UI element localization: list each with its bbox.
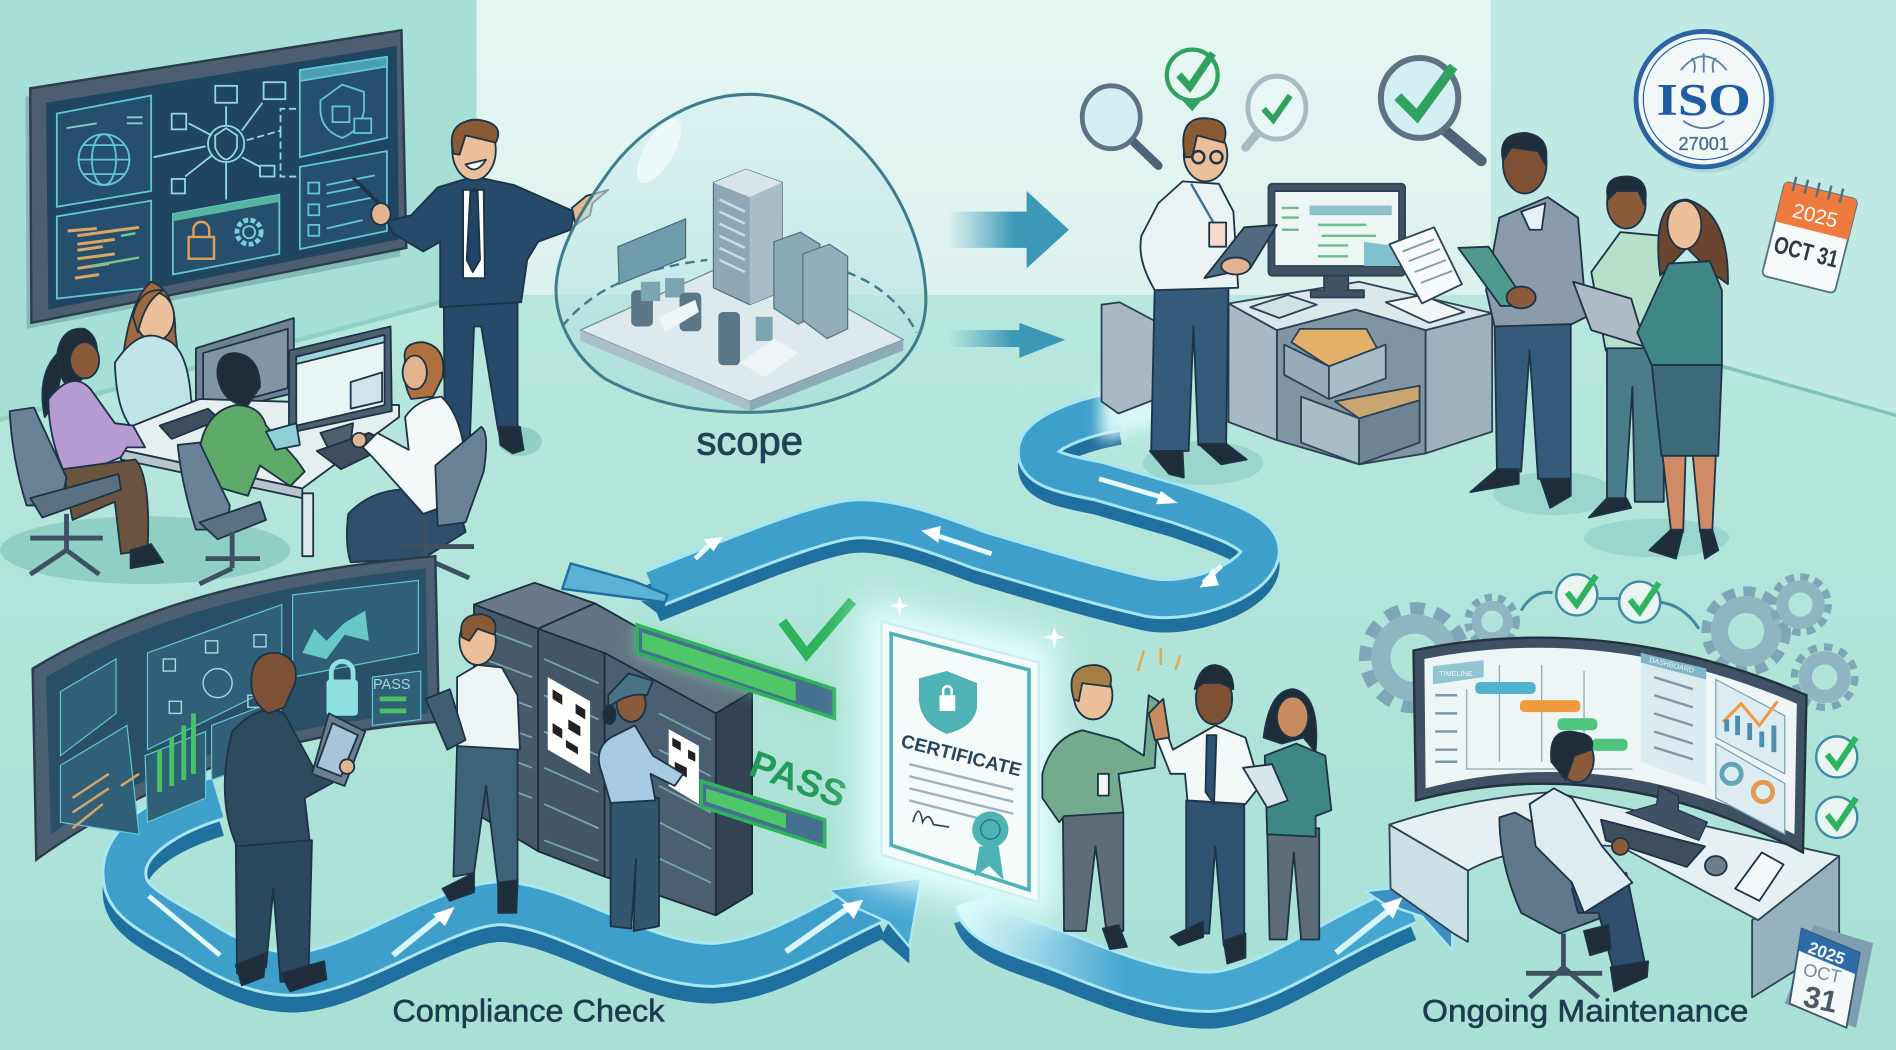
notepad xyxy=(1250,295,1317,318)
spark lines xyxy=(1138,648,1180,671)
dashboard panels xyxy=(60,580,421,834)
curved monitor with timeline xyxy=(1414,638,1807,852)
donut chart xyxy=(1716,744,1785,834)
mouse xyxy=(1705,856,1727,875)
dome with scoped infrastructure xyxy=(556,94,926,412)
flow path: ribbon from certificate to maintenance xyxy=(973,881,1452,1009)
compliance check: curved display xyxy=(33,556,439,860)
cabinet recess xyxy=(1277,310,1426,464)
keyboards xyxy=(160,409,220,439)
icon: faded magnifier xyxy=(1245,76,1306,148)
man in white shirt xyxy=(347,342,466,562)
head xyxy=(452,120,496,180)
auditor with glasses xyxy=(1140,118,1277,485)
signature xyxy=(913,811,949,827)
shoes xyxy=(498,427,524,453)
paper xyxy=(1389,227,1462,303)
icon: check one xyxy=(1556,574,1597,615)
filing cabinet desk and monitor xyxy=(1102,184,1492,464)
panel: code xyxy=(57,201,151,299)
flow path: upper ribbon from audit to server room xyxy=(562,385,1260,619)
flow path: lower ribbon to certificate xyxy=(124,798,921,991)
desk xyxy=(121,399,399,488)
dashboard list xyxy=(1641,653,1706,786)
middle chair xyxy=(178,443,266,584)
server racks xyxy=(474,583,752,915)
badge: ISO 27001: 27001 xyxy=(1679,134,1729,154)
large display with security dashboard xyxy=(25,30,406,329)
chair xyxy=(1499,813,1614,998)
panel: lock and gear xyxy=(173,195,279,274)
pass panel label: PASS xyxy=(373,677,411,693)
man in gray sweater xyxy=(1458,133,1614,515)
tablet xyxy=(1573,282,1646,347)
man in green xyxy=(200,353,305,496)
head xyxy=(1560,736,1594,782)
chart shape xyxy=(302,611,369,659)
keyboard xyxy=(1601,820,1705,867)
lower drawer files xyxy=(1335,386,1420,418)
woman in purple xyxy=(42,329,163,568)
hands xyxy=(572,190,608,225)
platform xyxy=(580,254,903,401)
panel: globe xyxy=(57,96,151,207)
trousers xyxy=(444,301,518,459)
presenter xyxy=(353,120,608,459)
gears xyxy=(1365,577,1855,707)
legs xyxy=(1572,873,1644,973)
magnifier and check icons xyxy=(1082,50,1481,166)
certificate xyxy=(859,596,1065,925)
shirt xyxy=(1530,788,1632,913)
label: scope: scope xyxy=(696,420,803,464)
seal xyxy=(972,811,1008,880)
wall calendar: 2025 xyxy=(1790,199,1840,233)
gear small left xyxy=(1468,597,1516,646)
wall calendar xyxy=(1762,175,1860,294)
pointer stick xyxy=(353,178,383,208)
auditor with tablet xyxy=(426,614,520,913)
timeline panel: TIMELINE xyxy=(1439,669,1473,678)
side cabinet xyxy=(1102,302,1156,414)
PASS label: PASS xyxy=(745,742,852,816)
gear large left xyxy=(1365,608,1464,707)
QR code small xyxy=(669,729,699,804)
small servers xyxy=(774,232,820,324)
panel: shield xyxy=(300,57,387,157)
dashed scope line xyxy=(562,260,917,333)
icon: magnifier xyxy=(1082,86,1158,166)
maintenance check marks xyxy=(1521,574,1857,838)
timeline panel xyxy=(1433,660,1632,769)
seated operator xyxy=(1499,732,1784,998)
compliance team xyxy=(225,614,683,991)
colleagues with tablet xyxy=(1573,176,1729,559)
gear right large xyxy=(1706,591,1786,671)
cabinet left panel xyxy=(1229,303,1277,440)
trend chart xyxy=(1716,680,1785,774)
pass progress bars xyxy=(635,621,837,846)
badge: ISO 27001 xyxy=(1636,31,1776,173)
gray monitor xyxy=(196,318,294,417)
desk calendar: 31 xyxy=(1801,980,1840,1020)
label: ongoing maintenance: Ongoing Maintenance xyxy=(1422,994,1748,1029)
check mark xyxy=(782,601,852,654)
desk calendar: OCT xyxy=(1801,960,1843,987)
panel: checklist xyxy=(300,151,387,249)
cabinet right panel xyxy=(1426,313,1492,453)
upper drawer files xyxy=(1291,329,1378,366)
woman in teal jacket xyxy=(1637,200,1728,559)
maintenance desk xyxy=(1389,792,1839,998)
QR code xyxy=(548,677,590,774)
gear right bottom xyxy=(1794,647,1855,707)
celebrating team xyxy=(1042,648,1331,964)
icon: check two xyxy=(1619,582,1660,623)
desk calendar: 2025 xyxy=(1806,938,1847,969)
right chair xyxy=(399,427,486,578)
stand xyxy=(1626,786,1707,840)
badge: ISO 27001: ISO xyxy=(1657,74,1751,125)
gear right top xyxy=(1773,577,1828,632)
icon: magnifier with check xyxy=(1381,58,1481,161)
desk calendar xyxy=(1785,925,1873,1028)
icon: check four xyxy=(1816,797,1857,838)
note xyxy=(1735,852,1784,901)
man in white shirt xyxy=(1149,665,1260,964)
monitor xyxy=(1268,184,1405,276)
left chair xyxy=(10,407,121,574)
dashboard list: DASHBOARD xyxy=(1648,655,1695,675)
arrows toward audit xyxy=(948,191,1069,358)
wall calendar: OCT 31 xyxy=(1771,232,1841,274)
icon: green check bubble xyxy=(1167,50,1218,111)
node diagram xyxy=(163,635,266,713)
officer xyxy=(599,673,683,931)
floor shadow xyxy=(0,516,290,584)
lock icon xyxy=(326,661,358,716)
desktop xyxy=(1229,282,1492,330)
workers xyxy=(631,278,798,377)
jacket and arms xyxy=(387,177,574,307)
icon: check three xyxy=(1816,736,1857,777)
label: compliance check: Compliance Check xyxy=(392,994,665,1029)
woman with brown hair xyxy=(115,282,196,429)
certificate title: CERTIFICATE xyxy=(899,730,1024,780)
man in green sweater xyxy=(1589,176,1669,518)
woman in teal jacket xyxy=(1243,689,1331,939)
manager in suit seen from behind xyxy=(225,653,365,991)
bars xyxy=(160,699,406,792)
paper stack xyxy=(1386,295,1464,323)
shield xyxy=(919,671,977,734)
sparkles xyxy=(890,596,1065,648)
tall server xyxy=(713,169,782,305)
monitor with software xyxy=(289,326,392,433)
wall screen xyxy=(618,219,686,284)
man in green shirt xyxy=(1042,665,1158,949)
team at workstations xyxy=(0,282,486,584)
network diagram xyxy=(154,82,297,200)
